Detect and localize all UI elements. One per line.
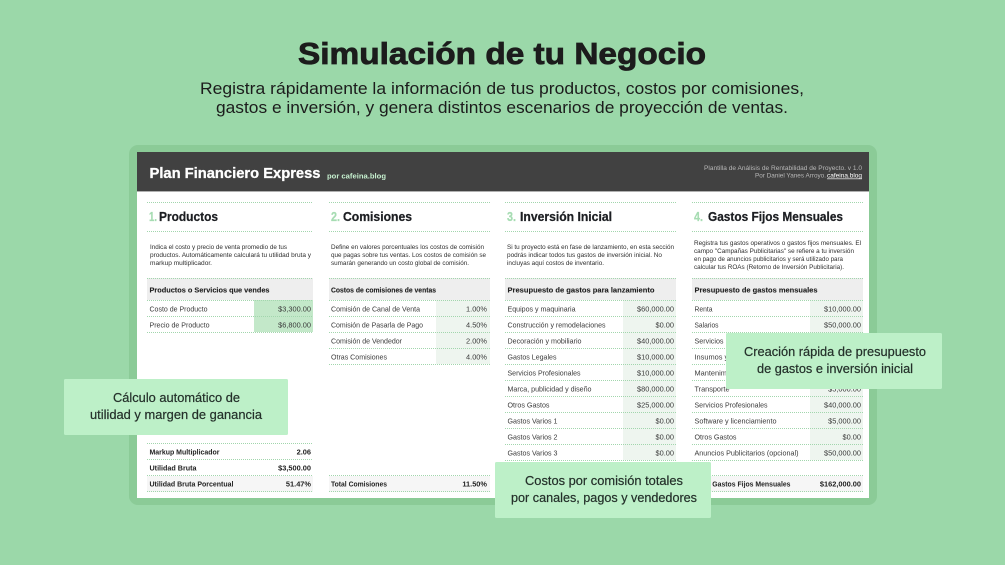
description: gastos fijos: campo "Campañas Publicitarias" se refiere a tu inversión bbox=[694, 248, 854, 255]
table: productos o servicios: Precio de Producto bbox=[150, 320, 210, 330]
spreadsheet name: Plan Financiero Express bbox=[150, 165, 320, 182]
table: presupuesto mensual: Anuncios Publicitarios (opcional) bbox=[694, 448, 798, 458]
table: presupuesto de lanzamiento: Decoración y mobiliario bbox=[508, 336, 582, 346]
table: resultados de utilidad bbox=[147, 444, 313, 492]
table: presupuesto mensual bbox=[692, 278, 863, 460]
table: presupuesto mensual: Renta bbox=[694, 304, 713, 314]
table: presupuesto mensual: $0.00 bbox=[842, 432, 861, 442]
callout: calculo automatico bbox=[64, 379, 288, 435]
total gastos fijos: $162,000.00 bbox=[820, 480, 861, 488]
table: productos o servicios: Productos o Servicios que vendes bbox=[150, 286, 270, 294]
table: costos de comisiones: Costos de comisiones de ventas bbox=[331, 286, 436, 294]
table: presupuesto mensual: Insumos y bbox=[694, 352, 728, 362]
panel: spreadsheet card bbox=[129, 145, 877, 505]
table: costos de comisiones: 4.50% bbox=[466, 320, 487, 330]
table: resultados de utilidad: Utilidad Bruta Porcentual bbox=[150, 480, 234, 488]
callout: costos por comision: por canales, pagos y vendedores bbox=[511, 491, 697, 505]
table: presupuesto mensual: $50,000.00 bbox=[824, 448, 861, 458]
panel: 1 productos bbox=[147, 202, 313, 492]
table: presupuesto de lanzamiento: $0.00 bbox=[656, 448, 674, 458]
callout: creacion rapida: Creación rápida de presupuesto bbox=[744, 345, 926, 359]
table: resultados de utilidad: $3,500.00 bbox=[278, 464, 311, 472]
table: presupuesto mensual: $5,000.00 bbox=[828, 384, 861, 394]
total gastos fijos: Total Gastos Fijos Mensuales bbox=[694, 480, 790, 488]
table: presupuesto de lanzamiento: Gastos Legales bbox=[508, 352, 557, 362]
panel: 3 inversion inicial bbox=[505, 202, 676, 460]
table: presupuesto mensual: Servicios Profesionales bbox=[694, 400, 768, 410]
description: inversion inicial: podrás indicar todos tus gastos de inversión inicial. No bbox=[507, 252, 662, 259]
description: gastos fijos bbox=[694, 240, 861, 271]
table: resultados de utilidad: 2.06 bbox=[297, 448, 311, 456]
heading: gastos fijos mensuales: Gastos Fijos Mensuales bbox=[708, 209, 843, 224]
table: costos de comisiones bbox=[329, 278, 490, 364]
spreadsheet header bar bbox=[137, 152, 869, 192]
description: comisiones: Define en valores porcentuales los costos de comisión bbox=[331, 244, 484, 251]
description: comisiones bbox=[331, 244, 486, 267]
table: costos de comisiones: Comisión de Pasarla de Pago bbox=[331, 320, 423, 330]
table: presupuesto de lanzamiento: $0.00 bbox=[656, 432, 674, 442]
table: presupuesto de lanzamiento: Equipos y maquinaria bbox=[508, 304, 576, 314]
total comisiones bbox=[329, 476, 490, 492]
heading: inversion inicial: 3. bbox=[507, 209, 516, 224]
description: productos: Indica el costo y precio de venta promedio de tus bbox=[150, 244, 288, 251]
table: presupuesto de lanzamiento: Marca, publicidad y diseño bbox=[508, 384, 592, 394]
table: presupuesto de lanzamiento: $25,000.00 bbox=[637, 400, 674, 410]
table: presupuesto mensual: Servicios bbox=[694, 336, 724, 346]
subtitle bbox=[200, 79, 804, 117]
total comisiones: Total Comisiones bbox=[331, 480, 387, 488]
table: presupuesto mensual: $50,000.00 bbox=[824, 320, 861, 330]
table: costos de comisiones: 2.00% bbox=[466, 336, 487, 346]
heading: comisiones: 2. bbox=[331, 209, 340, 224]
table: presupuesto de lanzamiento: Otros Gastos bbox=[508, 400, 550, 410]
table: presupuesto mensual: $5,000.00 bbox=[828, 416, 861, 426]
table: presupuesto mensual: $10,000.00 bbox=[824, 304, 861, 314]
table: presupuesto mensual: $40,000.00 bbox=[824, 400, 861, 410]
callout: calculo automatico: utilidad y margen de ganancia bbox=[90, 408, 262, 422]
description: productos: productos. Automáticamente calculará tu utilidad bruta y bbox=[150, 252, 312, 259]
table: costos de comisiones: 4.00% bbox=[466, 352, 487, 362]
table: presupuesto mensual: Mantenimiento bbox=[694, 368, 743, 378]
table: presupuesto de lanzamiento: $10,000.00 bbox=[637, 352, 674, 362]
table: presupuesto mensual: Transporte bbox=[694, 384, 730, 394]
description: productos: markup multiplicador. bbox=[150, 260, 212, 267]
panel: 4 gastos fijos mensuales bbox=[692, 202, 863, 492]
description: productos bbox=[150, 244, 312, 267]
total gastos fijos bbox=[692, 476, 863, 492]
subtitle: gastos e inversión, y genera distintos escenarios de proyección de ventas. bbox=[216, 98, 788, 117]
table: costos de comisiones: Otras Comisiones bbox=[331, 352, 387, 362]
callout: calculo automatico: Cálculo automático de bbox=[113, 391, 240, 405]
table: presupuesto de lanzamiento: $0.00 bbox=[656, 416, 674, 426]
heading: gastos fijos mensuales: 4. bbox=[694, 209, 703, 224]
table: resultados de utilidad: 51.47% bbox=[286, 480, 311, 488]
table: presupuesto mensual: Otros Gastos bbox=[694, 432, 737, 442]
description: gastos fijos: calcular tus ROAs (Retorno de Inversión Publicitaria). bbox=[694, 264, 844, 271]
table: presupuesto de lanzamiento: Presupuesto de gastos para lanzamiento bbox=[508, 286, 655, 294]
description: comisiones: que pagas sobre tus ventas. Los costos de comisión se bbox=[331, 252, 486, 259]
table: presupuesto de lanzamiento: Gastos Varios 2 bbox=[508, 432, 558, 442]
callout: creacion rapida bbox=[726, 333, 942, 389]
description: gastos fijos: Registra tus gastos operativos o gastos fijos mensuales. El bbox=[694, 240, 861, 247]
table: presupuesto de lanzamiento: Gastos Varios 3 bbox=[508, 448, 558, 458]
table: presupuesto mensual: Software y licenciamiento bbox=[694, 416, 776, 426]
template credits: Por Daniel Yanes Arroyo. bbox=[755, 172, 826, 180]
template credits bbox=[704, 165, 862, 180]
heading: comisiones: Comisiones bbox=[343, 209, 412, 224]
total comisiones: 11.50% bbox=[462, 480, 487, 488]
heading: productos: 1. bbox=[149, 209, 157, 224]
table: productos o servicios: $3,300.00 bbox=[278, 304, 311, 314]
description: inversion inicial bbox=[507, 244, 674, 267]
callout: creacion rapida: de gastos e inversión inicial bbox=[757, 362, 913, 376]
callout: costos por comision bbox=[495, 462, 711, 518]
panel: 2 comisiones bbox=[329, 202, 490, 492]
table: presupuesto de lanzamiento: $40,000.00 bbox=[637, 336, 674, 346]
description: gastos fijos: en pago de anuncios publicitarios y será utilizado para bbox=[694, 256, 843, 263]
table: costos de comisiones: 1.00% bbox=[466, 304, 487, 314]
table: costos de comisiones: Comisión de Canal de Venta bbox=[331, 304, 421, 314]
table: presupuesto de lanzamiento: $0.00 bbox=[656, 320, 674, 330]
description: comisiones: sumarán generando un costo global de comisión. bbox=[331, 260, 469, 267]
heading: inversion inicial: Inversión Inicial bbox=[520, 209, 612, 224]
table: presupuesto de lanzamiento: $60,000.00 bbox=[637, 304, 674, 314]
table: resultados de utilidad: Utilidad Bruta bbox=[150, 464, 197, 472]
table: presupuesto de lanzamiento: $10,000.00 bbox=[637, 368, 674, 378]
table: presupuesto de lanzamiento: $80,000.00 bbox=[637, 384, 674, 394]
table: presupuesto de lanzamiento: Construcción y remodelaciones bbox=[508, 320, 606, 330]
template credits: cafeina.blog bbox=[827, 172, 862, 180]
table: productos o servicios bbox=[147, 278, 313, 332]
byline: por cafeina.blog bbox=[327, 172, 386, 180]
table: costos de comisiones: Comisión de Vendedor bbox=[331, 336, 403, 346]
title: Simulación de tu Negocio bbox=[298, 36, 706, 71]
subtitle: Registra rápidamente la información de tus productos, costos por comisiones, bbox=[200, 79, 804, 98]
table: presupuesto mensual: Salarios bbox=[694, 320, 719, 330]
table: productos o servicios: $6,800.00 bbox=[278, 320, 311, 330]
description: inversion inicial: Si tu proyecto está en fase de lanzamiento, en esta sección bbox=[507, 244, 674, 251]
table: presupuesto de lanzamiento: Gastos Varios 1 bbox=[508, 416, 558, 426]
table: presupuesto de lanzamiento bbox=[505, 278, 676, 460]
table: presupuesto mensual: Presupuesto de gastos mensuales bbox=[694, 286, 818, 294]
heading: productos: Productos bbox=[159, 209, 218, 224]
template credits: Plantilla de Análisis de Rentabilidad de Proyecto. v 1.0 bbox=[704, 165, 862, 172]
table: resultados de utilidad: Markup Multiplicador bbox=[150, 448, 220, 456]
table: productos o servicios: Costo de Producto bbox=[150, 304, 208, 314]
callout: costos por comision: Costos por comisión totales bbox=[525, 474, 683, 488]
description: inversion inicial: incluyas aquí costos de inventario. bbox=[507, 260, 604, 267]
table: presupuesto de lanzamiento: Servicios Profesionales bbox=[508, 368, 581, 378]
